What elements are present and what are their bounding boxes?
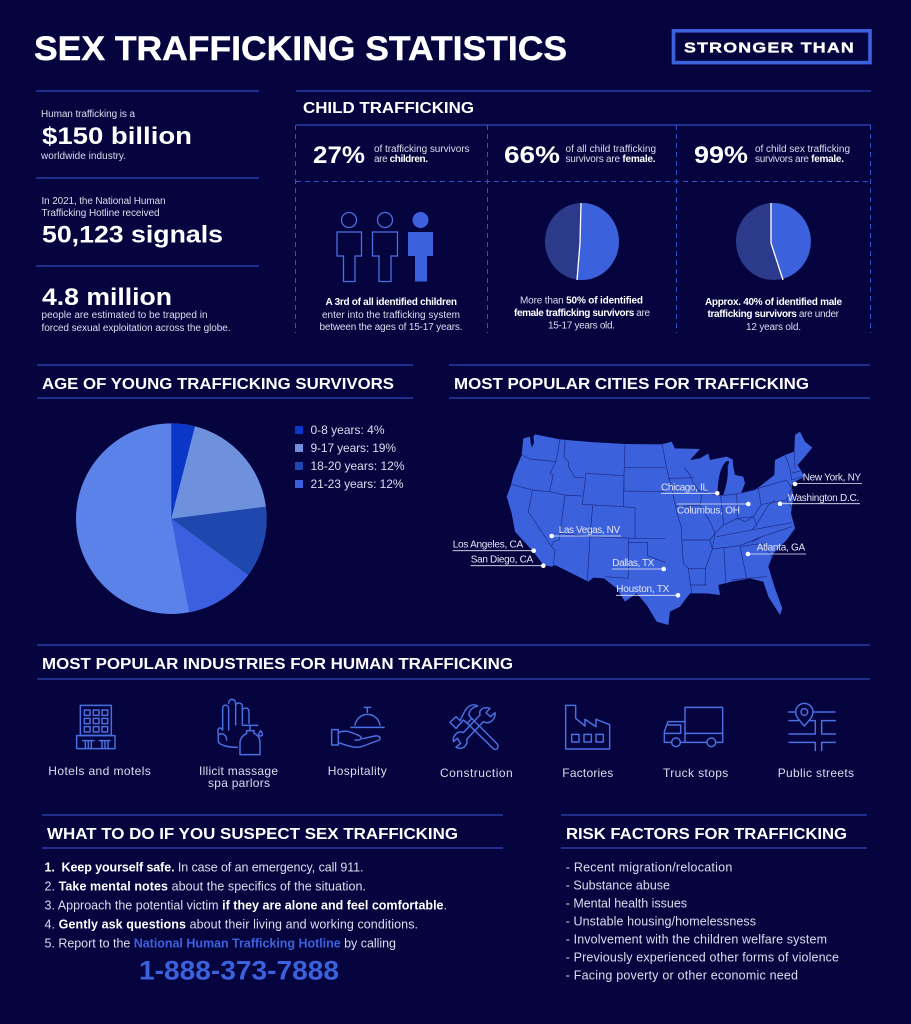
pie chart: age groups (76, 423, 267, 614)
pie: 40 percent of male survivors (736, 203, 811, 280)
icon: service bell on hand (332, 707, 384, 747)
list: risk factors: - Unstable housing/homelessness (566, 914, 756, 928)
stat: 4.8 million: forced sexual exploitation across the globe. (42, 323, 230, 334)
icon: hotel (77, 705, 115, 749)
stat: 99 percent: 99% (694, 142, 748, 169)
stat: 27 percent: are children. (374, 154, 428, 165)
stat: 150 billion (40, 109, 192, 162)
map label: Dallas (612, 558, 666, 571)
stat: 66 percent (504, 142, 656, 169)
map label: San Diego (471, 555, 546, 568)
icon: truck (664, 707, 723, 747)
map label: Dallas: Dallas, TX (612, 558, 655, 569)
heading: popular industries: MOST POPULAR INDUSTRIES FOR HUMAN TRAFFICKING (42, 656, 513, 673)
map label: Houston: Houston, TX (616, 584, 670, 595)
label: illicit massage spa parlors: spa parlors (208, 776, 270, 790)
logo: Stronger Than (674, 31, 870, 63)
map: United States (507, 432, 812, 625)
map label: Chicago: Chicago, IL (661, 483, 708, 494)
list: risk factors: - Substance abuse (566, 878, 670, 892)
pie: 50 percent of female survivors (545, 203, 619, 280)
caption: female survivors: female trafficking survivors are (514, 308, 650, 319)
map label: Los Angeles: Los Angeles, CA (453, 540, 524, 551)
label: truck stops: Truck stops (663, 766, 728, 780)
stat: 150 billion: $150 billion (42, 123, 192, 150)
map label: Las Vegas: Las Vegas, NV (559, 525, 621, 536)
caption: male survivors: 12 years old. (746, 322, 801, 333)
stat: 50,123 signals (42, 196, 223, 248)
caption: male survivors (705, 297, 842, 333)
map label: Columbus: Columbus, OH (677, 506, 740, 517)
stat: 27 percent (313, 142, 470, 169)
map label: New York: New York, NY (803, 473, 862, 484)
panel: what to do (42, 815, 503, 986)
stat: 66 percent: survivors are female. (566, 154, 656, 165)
stat: 4.8 million (42, 284, 230, 334)
panel: headline statistics (36, 91, 259, 334)
legend: age groups: 21-23 years: 12% (310, 477, 404, 491)
icon: hammer and wrench (450, 705, 498, 749)
stat: 99 percent: of child sex trafficking (755, 144, 850, 155)
legend: age groups: 0-8 years: 4% (310, 423, 385, 437)
icon: street map pin (788, 703, 835, 751)
map label: Los Angeles (453, 540, 536, 553)
panel: most popular cities (449, 365, 870, 625)
stat: 4.8 million: people are estimated to be trapped in (42, 310, 208, 321)
label: hospitality: Hospitality (328, 764, 387, 778)
list: risk factors: - Mental health issues (566, 896, 687, 910)
caption: female survivors (514, 296, 650, 332)
logo: Stronger Than: STRONGER THAN (684, 39, 855, 56)
caption: a third of children: between the ages of 15-17 years. (320, 322, 462, 333)
legend: age groups: 9-17 years: 19% (310, 441, 396, 455)
icon: three child figures (337, 212, 433, 282)
heading: popular cities: MOST POPULAR CITIES FOR TRAFFICKING (454, 376, 809, 393)
heading: what to do: WHAT TO DO IF YOU SUSPECT SEX TRAFFICKING (47, 826, 458, 843)
label: illicit massage spa parlors: Illicit massage (199, 764, 278, 778)
list: action steps: 3. Approach the potential victim if they are alone and feel comfortable. (44, 899, 447, 913)
label: illicit massage spa parlors (199, 764, 278, 790)
stat: 66 percent: of all child trafficking (566, 144, 656, 155)
map label: New York (793, 473, 862, 486)
stat: 99 percent (694, 142, 850, 169)
hotline number: 1-888-373-7888 (139, 956, 339, 986)
list: action steps: 5. Report to the National Human Trafficking Hotline by calling (44, 937, 396, 951)
map label: Atlanta (746, 543, 806, 556)
caption: a third of children: A 3rd of all identified children (326, 297, 457, 308)
panel: child trafficking (296, 91, 871, 333)
map label: Washington: Washington D.C. (788, 493, 859, 504)
label: public streets: Public streets (778, 766, 854, 780)
list: action steps: 4. Gently ask questions about their living and working conditions. (44, 918, 418, 932)
caption: male survivors: trafficking survivors are under (708, 309, 840, 320)
panel: age of young trafficking survivors (37, 365, 413, 614)
heading: risk factors: RISK FACTORS FOR TRAFFICKING (566, 826, 847, 843)
caption: female survivors: More than 50% of identified (520, 296, 643, 307)
title: SEX TRAFFICKING STATISTICS (34, 30, 567, 68)
stat: 27 percent: of trafficking survivors (374, 144, 470, 155)
caption: male survivors: Approx. 40% of identified male (705, 297, 842, 308)
caption: a third of children (320, 297, 462, 333)
panel: popular industries (37, 645, 870, 790)
stat: 50,123 signals: 50,123 signals (42, 222, 223, 248)
stat: 50,123 signals: Trafficking Hotline received (42, 208, 160, 219)
stat: 150 billion: worldwide industry. (40, 151, 126, 162)
list: risk factors: - Involvement with the children welfare system (566, 932, 827, 946)
label: construction: Construction (440, 766, 513, 780)
panel: risk factors (561, 815, 867, 982)
stat: 66 percent: 66% (504, 142, 560, 169)
caption: female survivors: 15-17 years old. (548, 321, 615, 332)
label: factories: Factories (562, 766, 613, 780)
map label: Chicago (661, 483, 720, 496)
stat: 50,123 signals: In 2021, the National Human (42, 196, 166, 207)
stat: 27 percent: 27% (313, 142, 365, 169)
stat: 99 percent: survivors are female. (755, 154, 844, 165)
stat: 150 billion: Human trafficking is a (41, 109, 135, 120)
list: risk factors: - Recent migration/relocation (566, 861, 732, 875)
legend: age groups (295, 423, 405, 491)
list: action steps (44, 861, 447, 951)
list: risk factors: - Previously experienced other forms of violence (566, 950, 839, 964)
caption: a third of children: enter into the trafficking system (322, 310, 460, 321)
stat: 4.8 million: 4.8 million (42, 284, 172, 311)
icon: factory (566, 705, 610, 749)
map label: San Diego: San Diego, CA (471, 555, 534, 566)
label: hotels and motels: Hotels and motels (48, 764, 151, 778)
list: action steps: 1. Keep yourself safe. In case of an emergency, call 911. (44, 861, 364, 875)
map label: Houston (616, 584, 680, 598)
heading: child trafficking: CHILD TRAFFICKING (303, 100, 474, 117)
list: risk factors: - Facing poverty or other economic need (566, 968, 798, 982)
map label: Atlanta: Atlanta, GA (757, 543, 806, 554)
map label: Columbus (677, 502, 751, 517)
list: risk factors (566, 861, 839, 982)
icon: massage hand and lotion (218, 699, 262, 755)
legend: age groups: 18-20 years: 12% (310, 459, 405, 473)
heading: age of survivors: AGE OF YOUNG TRAFFICKING SURVIVORS (42, 376, 394, 393)
list: action steps: 2. Take mental notes about the specifics of the situation. (44, 880, 366, 894)
